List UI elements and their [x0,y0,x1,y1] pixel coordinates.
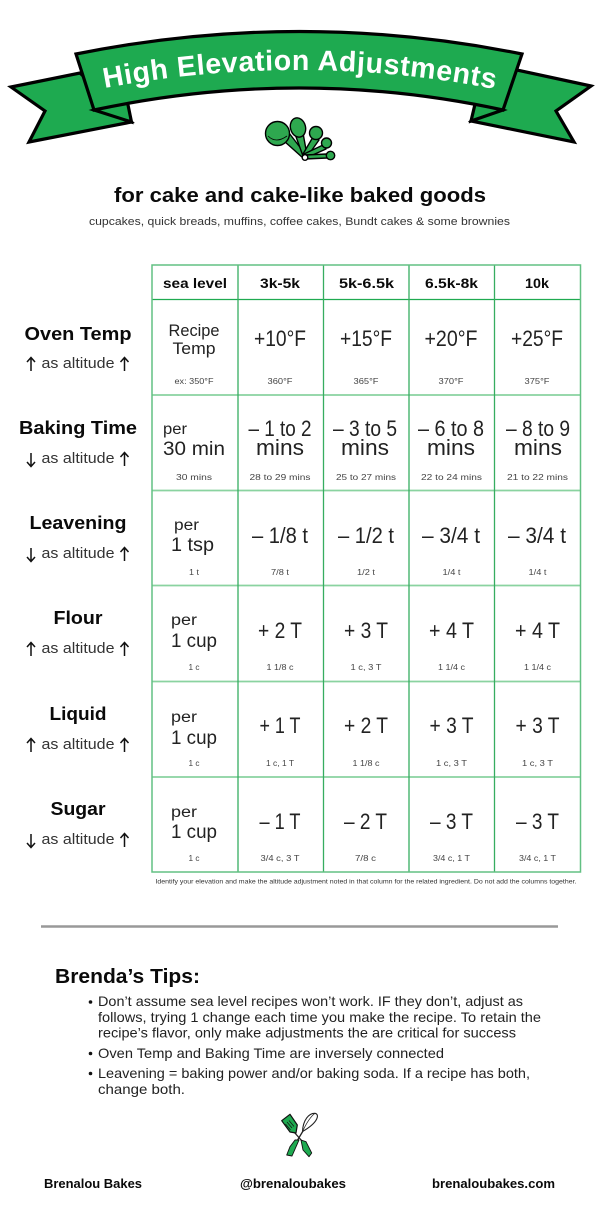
row: oven temp: Temp [172,340,216,358]
row: baking time [19,416,570,482]
row: leavening: per [174,517,199,534]
adjustment table grid [152,265,580,872]
row: baking time: as altitude [42,451,114,467]
row: oven temp [24,322,563,386]
icon: spatula and whisk [282,1113,317,1157]
tip one: Don’t assume sea level recipes won’t work. IF they don’t, adjust as [98,993,523,1009]
table header: sea level [163,275,227,291]
row: flour: 1 c [188,662,200,672]
table header: 6.5k-8k [425,275,478,291]
row: flour: 1 c, 3 T [350,662,382,672]
row: flour: 1 cup [171,630,217,652]
row: oven temp: 360°F [268,376,292,386]
row: oven temp: +25°F [511,326,563,351]
row: leavening: – 1/2 t [338,523,394,548]
row: baking time: 22 to 24 mins [421,472,482,482]
row: flour: + 4 T [515,618,560,643]
row: flour: 1 1/4 c [524,662,552,672]
row: flour: as altitude [42,641,114,657]
row: liquid: + 2 T [344,713,388,738]
banner main arc [76,32,522,110]
row: liquid [27,704,560,768]
subtitle: for cake and cake-like baked goods [114,185,486,207]
row: liquid: 1 c, 3 T [522,758,553,768]
tip three: Leavening = baking power and/or baking soda. If a recipe has both, [98,1065,530,1081]
row: sugar: – 3 T [430,809,473,834]
banner right fold [471,100,503,121]
footer: Brenalou Bakes [44,1177,142,1191]
row: baking time: – 6 to 8 [418,416,484,441]
row: sugar: as altitude [42,832,114,848]
table header: 5k-6.5k [339,275,394,291]
row: sugar: – 3 T [516,809,559,834]
row: oven temp: Recipe [168,322,220,340]
row: leavening: 7/8 t [271,567,290,577]
title: High Elevation Adjustments [103,50,496,88]
tip one [89,993,541,1040]
row: flour: + 2 T [258,618,302,643]
row: liquid: as altitude [42,737,114,753]
row: flour: + 4 T [429,618,474,643]
row: leavening: Leavening [30,513,126,533]
row: sugar: – 1 T [260,809,300,834]
row: baking time: 21 to 22 mins [507,472,568,482]
table header: 10k [525,275,549,291]
tips heading: Brenda’s Tips: [55,965,200,988]
description: cupcakes, quick breads, muffins, coffee cakes, Bundt cakes & some brownies [89,216,511,228]
table header: 3k-5k [260,275,300,291]
row: baking time: – 8 to 9 [506,416,570,441]
row: oven temp: +15°F [340,326,392,351]
banner left fold [94,100,132,122]
row: liquid: + 3 T [516,713,560,738]
row: oven temp: +10°F [254,326,306,351]
row: baking time: mins [514,435,562,460]
row: flour: 1 1/4 c [438,662,466,672]
banner left tail [11,73,132,142]
row: baking time: per [163,421,187,438]
row: baking time: mins [341,435,389,460]
icon: measuring spoons [266,116,335,160]
row: liquid: 1 c, 1 T [266,758,294,768]
row: baking time: mins [256,435,304,460]
row: leavening: 1/2 t [357,567,376,577]
row: baking time: 30 min [163,438,225,460]
row: sugar: 1 c [188,853,200,863]
row: oven temp: as altitude [42,356,114,372]
row: leavening: – 3/4 t [508,523,566,548]
row: sugar: Sugar [50,799,106,819]
row: oven temp: +20°F [424,326,478,351]
row: leavening: 1/4 t [528,567,547,577]
footer [44,1177,555,1191]
row: baking time: Baking Time [19,418,137,438]
row: flour: per [171,612,197,629]
row: baking time: 25 to 27 mins [336,472,396,482]
row: oven temp: 365°F [354,376,378,386]
tip three [89,1065,530,1097]
row: liquid: per [171,709,197,726]
row: baking time: 30 mins [176,472,212,482]
row: sugar: 7/8 c [355,853,377,863]
row: liquid: 1 c [188,758,200,768]
row: flour: Flour [54,608,102,628]
row: leavening: 1 t [189,567,200,577]
row: sugar: 3/4 c, 3 T [260,853,300,863]
row: sugar [27,799,559,863]
row: sugar: 3/4 c, 1 T [519,853,556,863]
row: leavening [27,513,566,577]
row: liquid: + 3 T [430,713,474,738]
row: sugar: – 2 T [344,809,387,834]
row: liquid: 1 c, 3 T [436,758,467,768]
row: flour [27,608,560,672]
row: liquid: 1 cup [171,727,217,749]
row: liquid: 1 1/8 c [352,758,380,768]
row: oven temp: 370°F [438,376,464,386]
row: flour: 1 1/8 c [266,662,294,672]
row: liquid: Liquid [50,704,106,724]
row: sugar: per [171,804,197,821]
tips panel [55,965,541,1097]
row: baking time: – 3 to 5 [333,416,397,441]
footer: @brenaloubakes [240,1177,346,1191]
row: leavening: – 3/4 t [422,523,480,548]
banner right tail [471,70,591,142]
row: baking time: mins [427,435,475,460]
footer: brenaloubakes.com [432,1177,555,1191]
row: leavening: 1/4 t [442,567,461,577]
tip two: Oven Temp and Baking Time are inversely connected [98,1045,444,1061]
row: baking time: – 1 to 2 [248,416,312,441]
row: flour: + 3 T [344,618,388,643]
tip three: change both. [98,1081,185,1097]
row: baking time: 28 to 29 mins [250,472,310,482]
row: leavening: – 1/8 t [252,523,308,548]
row: oven temp: Oven Temp [24,324,132,344]
row: liquid: + 1 T [260,713,300,738]
row: oven temp: ex: 350°F [174,376,214,386]
tip one: recipe’s flavor, only make adjustments the are critical for success [98,1024,516,1040]
row: sugar: 3/4 c, 1 T [433,853,470,863]
row: oven temp: 375°F [524,376,550,386]
table header [163,275,549,291]
table footnote: Identify your elevation and make the altitude adjustment noted in that column for the related ingredient. Do not add the columns together. [156,878,577,886]
tip one: follows, trying 1 change each time you make the recipe. To retain the [98,1009,541,1025]
row: leavening: 1 tsp [171,534,214,556]
row: sugar: 1 cup [171,821,217,843]
title banner [7,30,595,144]
row: leavening: as altitude [42,546,114,562]
